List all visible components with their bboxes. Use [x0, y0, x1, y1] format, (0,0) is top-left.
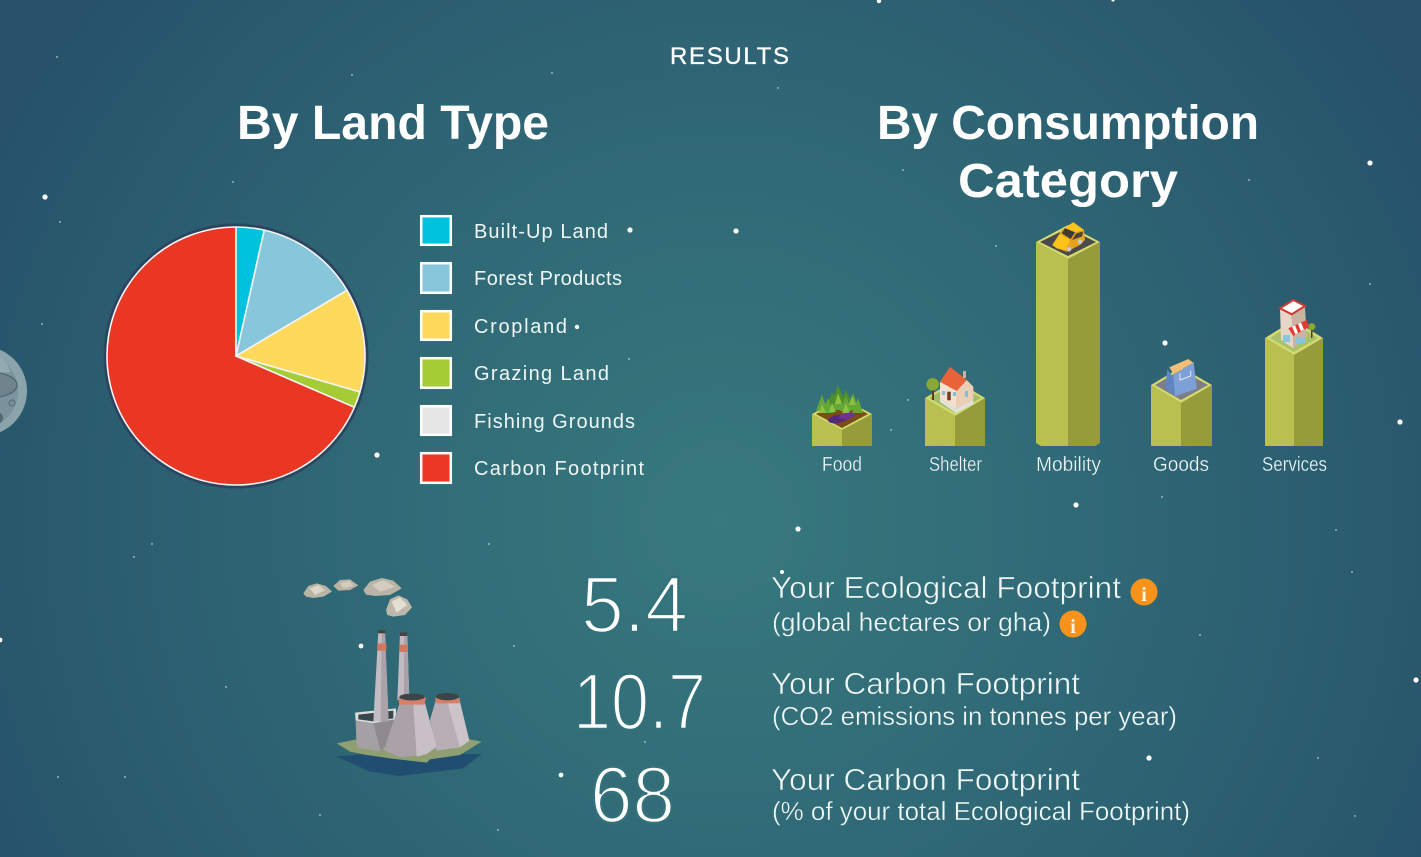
icon: info: i: [1070, 616, 1076, 638]
stat: carbon footprint tonnes: (CO2 emissions in tonnes per year): [772, 701, 1177, 731]
title: RESULTS: [670, 43, 789, 70]
slice: forest products: [236, 230, 347, 356]
stat: ecological footprint: 5.4: [581, 560, 688, 649]
bar: food: [812, 385, 872, 446]
legend: [421, 216, 644, 483]
stat: carbon footprint percent: Your Carbon Footprint: [771, 762, 1080, 797]
stat: carbon footprint percent: [590, 750, 1190, 839]
category labels: Goods: [1153, 454, 1209, 476]
category labels: [822, 454, 1327, 476]
category labels: Services: [1262, 454, 1327, 476]
stat: carbon footprint percent: (% of your total Ecological Footprint): [772, 796, 1190, 826]
island: [337, 754, 482, 776]
slice: carbon footprint: [107, 227, 354, 485]
heading: by consumption category: By Consumption: [877, 97, 1259, 150]
cooling towers: [430, 699, 469, 751]
chimneys: [397, 634, 409, 700]
heading: by land type: By Land Type: [237, 97, 549, 150]
legend: Grazing Land: [474, 363, 609, 385]
legend: Fishing Grounds: [474, 411, 635, 433]
icon: info: i: [1141, 584, 1147, 606]
category labels: Food: [822, 454, 862, 476]
stat: carbon footprint tonnes: [573, 657, 1177, 746]
slice: built-up land: [236, 227, 264, 356]
bar: mobility: [1036, 222, 1100, 446]
heading: by consumption category: Category: [958, 155, 1178, 208]
category labels: Shelter: [929, 454, 982, 476]
building: [355, 708, 396, 723]
stat: ecological footprint: Your Ecological Footprint: [771, 570, 1121, 605]
slice: cropland: [236, 290, 365, 392]
stat: carbon footprint tonnes: Your Carbon Footprint: [771, 666, 1080, 701]
slice: grazing land: [236, 356, 360, 407]
icon: moon: [0, 346, 27, 436]
stat: carbon footprint tonnes: 10.7: [573, 657, 706, 746]
stat: ecological footprint: [581, 560, 1158, 649]
icon: info: [1060, 610, 1086, 638]
icon: info: [1130, 578, 1158, 606]
icon: power plant: [303, 578, 482, 776]
stat: carbon footprint percent: 68: [590, 750, 675, 839]
pie chart: [104, 224, 368, 488]
stat: ecological footprint: (global hectares or gha): [772, 607, 1051, 637]
bar chart: consumption category: [812, 222, 1327, 476]
legend: Cropland: [474, 316, 567, 338]
bar: services: [1265, 300, 1323, 446]
legend: Carbon Footprint: [474, 458, 644, 480]
bar: shelter: [925, 367, 985, 446]
bar: goods: [1151, 359, 1212, 446]
legend: Forest Products: [474, 268, 622, 290]
category labels: Mobility: [1036, 454, 1101, 476]
legend: Built-Up Land: [474, 221, 608, 243]
smoke clouds: [303, 578, 412, 617]
